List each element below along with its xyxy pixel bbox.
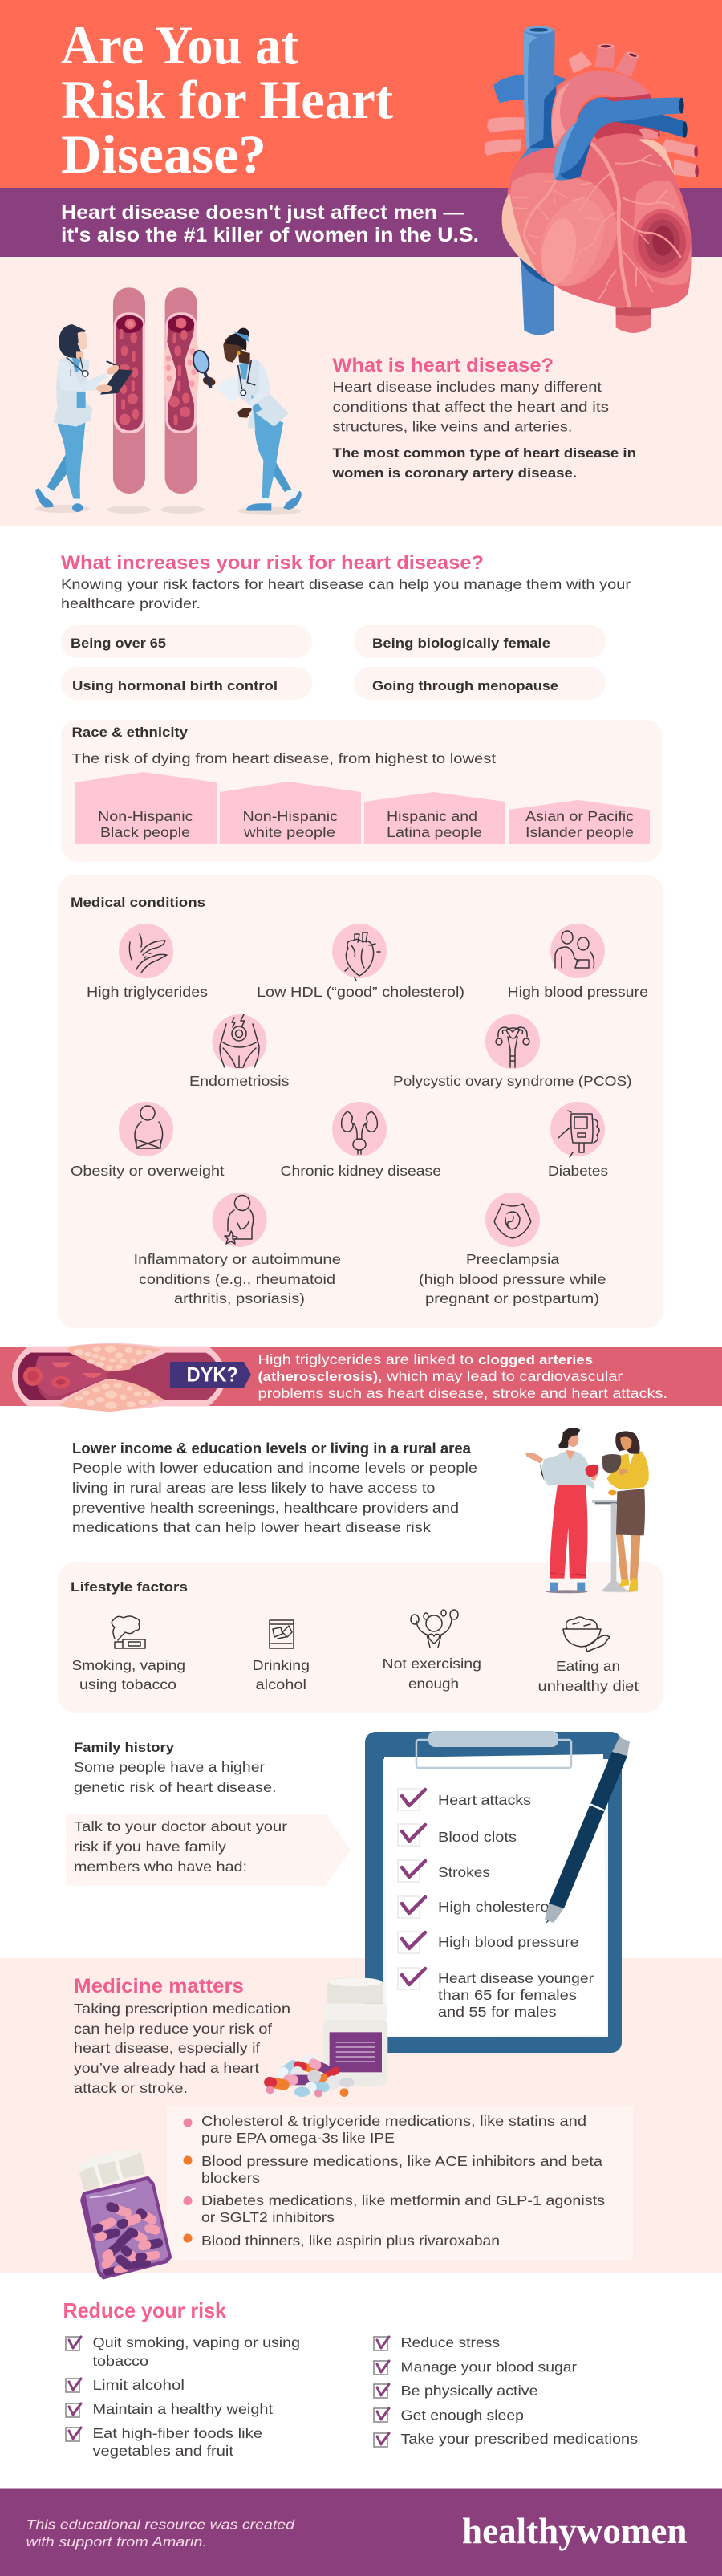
heading: Reduce your risk	[63, 2298, 227, 2322]
section: reduce your risk: tobacco	[93, 2353, 148, 2369]
intro section background	[0, 257, 722, 526]
checklist: Heart attacks	[438, 1792, 531, 1808]
condition: endometriosis: Endometriosis	[189, 1073, 290, 1089]
banner: did you know: (atherosclerosis)	[258, 1369, 378, 1384]
heading: Medicine matters	[74, 1975, 244, 1997]
bar: non-Hispanic Black: Non-Hispanic	[98, 808, 193, 824]
condition: high blood pressure: High blood pressure	[507, 984, 648, 1000]
bar: non-Hispanic white	[220, 782, 361, 844]
title: Are You at	[61, 14, 298, 75]
condition: inflammatory or autoimmune: Inflammatory or autoimmune	[133, 1251, 341, 1267]
checkboxes	[66, 2337, 389, 2447]
logo: healthywomen: healthywomen	[462, 2510, 687, 2551]
bar: Asian or Pacific Islander	[509, 800, 650, 844]
condition: chronic kidney disease	[281, 1102, 441, 1179]
condition: PCOS: Polycystic ovary syndrome (PCOS)	[393, 1073, 632, 1089]
condition: inflammatory or autoimmune	[133, 1193, 341, 1306]
text block: what increases your risk: healthcare provider.	[61, 595, 201, 611]
bullets	[183, 2119, 193, 2242]
factor: exercise: enough	[408, 1676, 459, 1692]
bar: Hispanic and Latina: Latina people	[387, 824, 482, 840]
condition: high blood pressure	[507, 924, 648, 1000]
checklist: Blood clots	[438, 1829, 517, 1845]
left woman	[525, 1428, 599, 1591]
panel: race and ethnicity: The risk of dying from heart disease, from highest to lowest	[72, 750, 496, 766]
healthy artery	[113, 287, 145, 494]
condition: diabetes: Diabetes	[548, 1163, 608, 1179]
condition: PCOS	[393, 1014, 632, 1089]
condition: chronic kidney disease: Chronic kidney disease	[281, 1163, 441, 1179]
shadows	[35, 505, 301, 515]
banner: did you know	[0, 1343, 722, 1412]
heading: What is heart disease?	[332, 355, 554, 376]
factor: exercise	[382, 1610, 481, 1692]
panel: lifestyle factors: Lifestyle factors	[71, 1579, 188, 1595]
title	[61, 14, 393, 185]
bottle	[323, 1977, 387, 2086]
subtitle: Heart disease doesn't just affect men —	[61, 201, 464, 224]
banner: did you know: clogged arteries	[478, 1352, 593, 1367]
DYK tag: DYK?	[186, 1364, 238, 1387]
panel: lifestyle factors	[58, 1562, 663, 1713]
condition: diabetes	[548, 1102, 608, 1179]
panel: medication list: Blood thinners, like aspirin plus rivaroxaban	[201, 2233, 500, 2249]
section: reduce your risk: Get enough sleep	[401, 2407, 524, 2424]
title: Disease?	[61, 124, 266, 185]
factor: alcohol: Drinking	[252, 1657, 310, 1673]
text block: income education rural	[72, 1440, 477, 1535]
title: Risk for Heart	[61, 69, 393, 130]
section: reduce your risk: Maintain a healthy weight	[93, 2401, 273, 2417]
text block: family history	[74, 1740, 276, 1795]
heading: What increases your risk for heart disease?	[61, 552, 484, 574]
panel: medication list: blockers	[201, 2170, 260, 2186]
bar: Hispanic and Latina	[364, 792, 505, 844]
text block: income education rural: People with lower education and income levels or people	[72, 1460, 477, 1476]
bar: Asian or Pacific Islander: Islander people	[525, 824, 634, 840]
arrow callout: talk to your doctor	[66, 1814, 351, 1886]
text block: medicine matters: you’ve already had a heart	[74, 2060, 259, 2076]
text block: what is heart disease	[331, 355, 636, 481]
condition: preeclampsia: pregnant or postpartum)	[425, 1290, 599, 1306]
panel: medication list	[167, 2106, 633, 2260]
text block: medicine matters	[74, 1975, 290, 2096]
factor: smoking: Smoking, vaping	[72, 1657, 185, 1673]
pills	[263, 2054, 355, 2098]
section: reduce your risk: Reduce stress	[401, 2334, 500, 2350]
section: reduce your risk: Limit alcohol	[93, 2377, 185, 2393]
condition: preeclampsia	[419, 1193, 606, 1306]
footer	[0, 2488, 722, 2576]
text block: what is heart disease: conditions that affect the heart and its	[332, 399, 609, 415]
condition: high triglycerides: High triglycerides	[87, 984, 208, 1000]
right woman	[602, 1431, 649, 1592]
text block: income education rural: living in rural areas are less likely to have access to	[72, 1480, 435, 1496]
text block: medicine matters: can help reduce your risk of	[74, 2021, 272, 2037]
factor: smoking: using tobacco	[79, 1676, 176, 1692]
subtitle	[61, 201, 479, 246]
condition: endometriosis	[189, 1014, 290, 1089]
bar: non-Hispanic white: white people	[243, 824, 335, 840]
panel: medication list: Blood pressure medications, like ACE inhibitors and beta	[201, 2153, 602, 2169]
subtitle band	[0, 188, 722, 257]
header background	[0, 0, 722, 188]
illustration: two women with purses	[525, 1428, 649, 1593]
bar: non-Hispanic Black: Black people	[100, 824, 190, 840]
checklist: than 65 for females	[438, 1987, 577, 2003]
arrow callout: talk to your doctor: Talk to your doctor about your	[74, 1818, 287, 1834]
clogged artery	[164, 287, 199, 494]
section: reduce your risk: Take your prescribed medications	[401, 2431, 638, 2447]
section: reduce your risk: Quit smoking, vaping or using	[93, 2334, 300, 2350]
section: reduce your risk: Be physically active	[401, 2383, 537, 2399]
factor: diet: unhealthy diet	[537, 1678, 639, 1694]
checklist: High cholesterol	[438, 1899, 553, 1915]
panel: medical conditions	[58, 875, 663, 1328]
checklist: High blood pressure	[438, 1934, 579, 1950]
panel: medication list: or SGLT2 inhibitors	[201, 2209, 335, 2225]
pills: risk factors: Being over 65	[71, 636, 166, 651]
text block: family history: Family history	[74, 1740, 175, 1755]
DYK tag	[170, 1362, 251, 1388]
panel: race and ethnicity: Race & ethnicity	[72, 725, 189, 740]
text block: what increases your risk: Knowing your risk factors for heart disease can help you manage them with your	[61, 576, 631, 592]
pills: risk factors: Using hormonal birth control	[72, 678, 278, 693]
bar: Hispanic and Latina: Hispanic and	[387, 808, 477, 824]
factor: diet	[537, 1617, 639, 1694]
text block: what is heart disease: Heart disease includes many different	[332, 379, 602, 395]
factor: alcohol: alcohol	[255, 1676, 306, 1692]
condition: preeclampsia: (high blood pressure while	[419, 1271, 606, 1287]
text block: what is heart disease: women is coronary artery disease.	[331, 465, 577, 481]
text block: medicine matters: Taking prescription medication	[74, 2001, 290, 2017]
condition: high triglycerides	[87, 924, 208, 1000]
illustration: white medicine bottle and pills	[263, 1977, 387, 2098]
text block: what increases your risk	[61, 552, 631, 611]
checklist: and 55 for males	[438, 2004, 557, 2020]
clipboard	[365, 1731, 630, 2053]
section background: medicine matters	[0, 1958, 722, 2273]
factor: exercise: Not exercising	[382, 1656, 481, 1672]
condition: inflammatory or autoimmune: arthritis, psoriasis)	[174, 1290, 305, 1306]
text block: what is heart disease: structures, like veins and arteries.	[332, 419, 573, 435]
section: reduce your risk: Manage your blood sugar	[401, 2359, 577, 2375]
table	[592, 1500, 636, 1591]
checklist: Heart disease younger	[438, 1970, 594, 1986]
banner: did you know: problems such as heart disease, stroke and heart attacks.	[258, 1385, 667, 1401]
section: reduce your risk	[63, 2298, 638, 2459]
panel: race and ethnicity	[61, 720, 662, 862]
icon: anatomical heart	[485, 26, 699, 335]
left doctor	[35, 324, 133, 512]
illustration: doctors examining arteries	[35, 287, 302, 515]
condition: inflammatory or autoimmune: conditions (e.g., rheumatoid	[139, 1271, 335, 1287]
pills: risk factors	[61, 625, 606, 700]
right doctor	[191, 328, 302, 511]
banner: did you know: High triglycerides are linked to	[258, 1351, 473, 1367]
condition: low HDL	[257, 924, 464, 1000]
section: reduce your risk: Eat high-fiber foods like	[93, 2425, 262, 2441]
bar: non-Hispanic white: Non-Hispanic	[242, 808, 338, 824]
pills: risk factors: Going through menopause	[372, 678, 558, 693]
panel: medication list: pure EPA omega-3s like IPE	[201, 2130, 395, 2146]
arrow callout: talk to your doctor: risk if you have family	[74, 1839, 226, 1855]
sponsor note	[26, 2517, 295, 2550]
capsules	[90, 2201, 164, 2277]
subtitle: it's also the #1 killer of women in the U.S.	[61, 224, 479, 246]
sponsor note: This educational resource was created	[26, 2517, 295, 2533]
banner: did you know: , which may lead to cardiovascular	[378, 1368, 623, 1384]
text block: medicine matters: attack or stroke.	[74, 2080, 188, 2096]
section: reduce your risk: vegetables and fruit	[93, 2443, 233, 2459]
bar: non-Hispanic Black	[75, 772, 217, 844]
condition: obesity: Obesity or overweight	[71, 1163, 225, 1179]
pen	[545, 1737, 630, 1924]
bar: Asian or Pacific Islander: Asian or Pacific	[525, 808, 634, 824]
text block: income education rural: preventive health screenings, healthcare providers and	[72, 1500, 459, 1516]
panel: medication list: Diabetes medications, like metformin and GLP-1 agonists	[201, 2192, 605, 2208]
condition: obesity	[71, 1102, 225, 1179]
factor: diet: Eating an	[556, 1658, 620, 1674]
pills: risk factors: Being biologically female	[372, 636, 550, 651]
sponsor note: with support from Amarin.	[26, 2534, 207, 2550]
checklist: Strokes	[438, 1864, 490, 1880]
illustration: clogged artery	[12, 1343, 226, 1412]
text block: what is heart disease: The most common type of heart disease in	[332, 445, 636, 461]
condition: low HDL: Low HDL (“good” cholesterol)	[257, 984, 464, 1000]
condition: preeclampsia: Preeclampsia	[466, 1251, 559, 1267]
panel: medication list: Cholesterol & triglyceride medications, like statins and	[201, 2113, 586, 2129]
arrow callout: talk to your doctor: members who have had:	[74, 1859, 247, 1875]
text block: family history: genetic risk of heart disease.	[74, 1779, 276, 1795]
text block: medicine matters: heart disease, especially if	[74, 2040, 260, 2056]
panel: medical conditions: Medical conditions	[71, 895, 205, 910]
text block: income education rural: Lower income & education levels or living in a rural area	[72, 1440, 472, 1457]
checklist	[398, 1789, 594, 2020]
text block: income education rural: medications that can help lower heart disease risk	[72, 1519, 431, 1535]
illustration: purple pill bottle	[78, 2150, 172, 2280]
factor: alcohol	[252, 1620, 310, 1692]
factor: smoking	[72, 1616, 185, 1692]
text block: family history: Some people have a higher	[74, 1759, 265, 1775]
